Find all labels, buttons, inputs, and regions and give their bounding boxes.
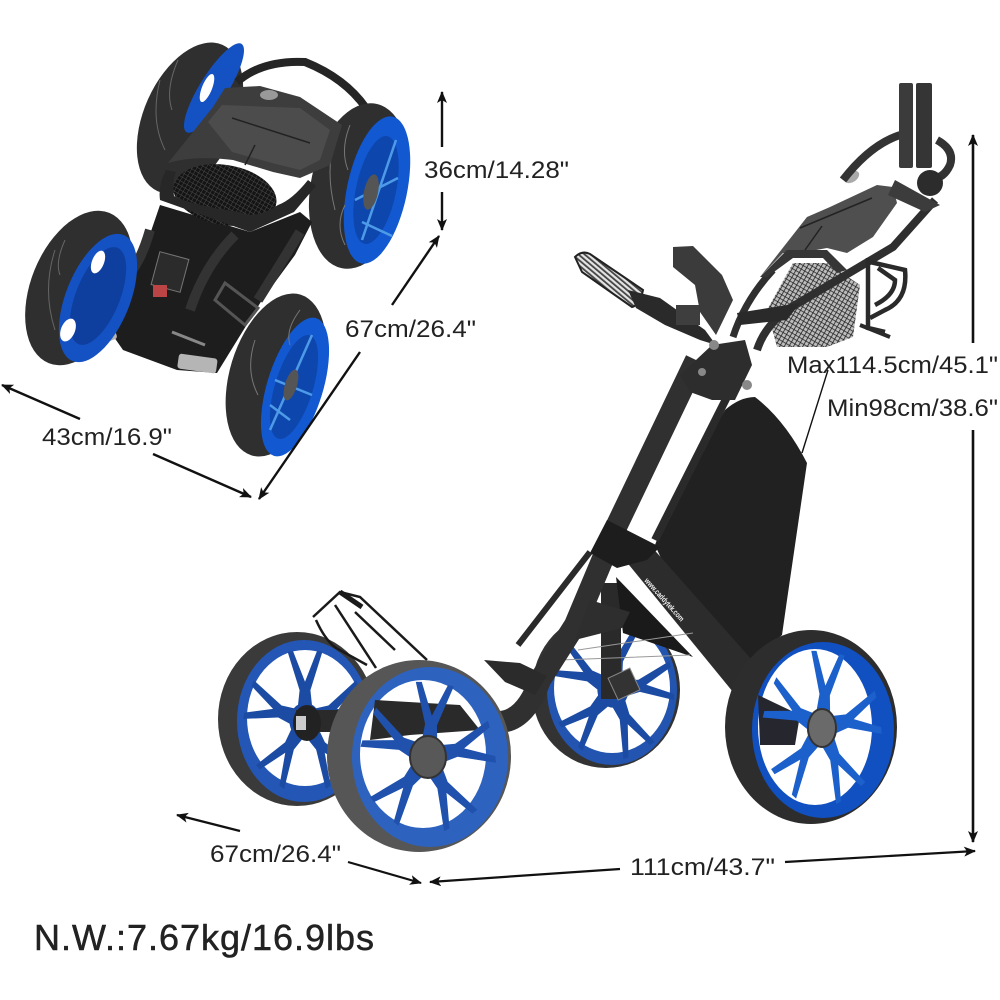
- arrow: cart width: [177, 815, 421, 883]
- folding hinge: [575, 600, 630, 640]
- label: cart length: 111cm/43.7": [630, 854, 775, 881]
- label: cart width: 67cm/26.4": [210, 841, 341, 868]
- label: min height: Min98cm/38.6": [827, 395, 998, 422]
- folded cart: bag deck: [168, 86, 342, 178]
- folded cart: front right wheel: [207, 281, 345, 469]
- umbrella holder: [888, 83, 943, 212]
- label: net weight: N.W.:7.67kg/16.9lbs: [34, 917, 374, 958]
- bottle holder: [860, 258, 905, 337]
- mesh basket: [767, 263, 860, 347]
- front wheel: [327, 660, 511, 852]
- basket arch: [760, 250, 847, 277]
- flip lever: [673, 246, 733, 335]
- main tube: [498, 360, 696, 722]
- label: max height: Max114.5cm/45.1": [787, 352, 998, 379]
- folded cart: frame band: [160, 170, 316, 232]
- middle wheel: [532, 583, 685, 768]
- folded bag clip basket: [313, 592, 427, 668]
- bag: [655, 397, 807, 662]
- arrow: folded width: [2, 385, 251, 497]
- folded cart photo: [4, 26, 423, 469]
- arrow: cart height: [972, 135, 974, 842]
- bag deck: [760, 168, 897, 277]
- website label: www.caddytek.com: [642, 576, 686, 623]
- folded cart: rear right wheel: [295, 94, 423, 278]
- upper arm tubes: [733, 200, 935, 350]
- label: folded length: 67cm/26.4": [345, 316, 476, 343]
- folded cart: front left wheel: [4, 195, 154, 381]
- arrow: folded length: [259, 236, 439, 499]
- label: folded height: 36cm/14.28": [424, 157, 569, 184]
- scorecard paddle: [575, 253, 716, 345]
- folded cart: handle: [237, 62, 366, 108]
- secondary rail: [655, 395, 728, 540]
- folding joint plate: [590, 520, 660, 568]
- back left wheel: [218, 632, 376, 806]
- handle: [843, 135, 951, 180]
- right wheel: [725, 630, 897, 824]
- arrow: cart length: [430, 851, 975, 882]
- folded cart: rear left wheel: [115, 26, 265, 210]
- collar joints: [680, 340, 752, 400]
- arrow: folded height: [441, 92, 443, 230]
- front rod: [518, 552, 590, 645]
- leader line: [802, 370, 828, 453]
- folded cart: lower frame and mechanism: [98, 205, 312, 374]
- unfolded cart photo: [218, 83, 951, 852]
- basket strap: [737, 303, 800, 325]
- label: folded width: 43cm/16.9": [42, 424, 172, 451]
- front connector: [484, 660, 547, 695]
- folded cart: mesh basket: [169, 156, 281, 234]
- rear frame plate: [560, 545, 752, 692]
